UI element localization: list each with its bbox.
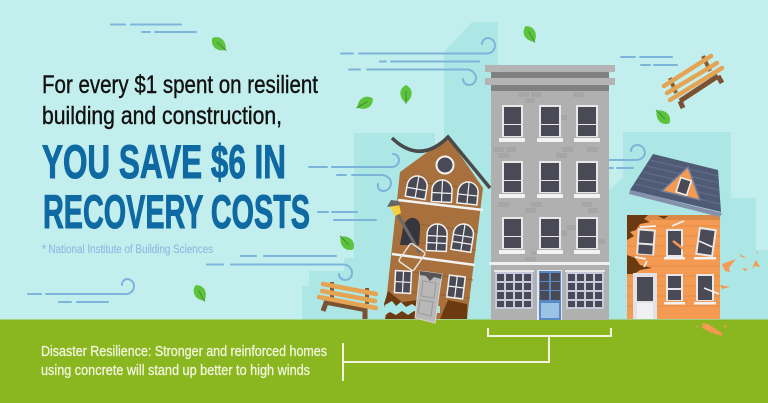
broken trim pieces: [635, 226, 656, 267]
storefront ledge: [489, 262, 610, 265]
background city silhouettes: [302, 22, 768, 320]
arched window: [405, 174, 429, 200]
leaf: [336, 232, 357, 253]
grey reinforced building: [485, 65, 615, 320]
lower window: [694, 274, 719, 304]
leaf: [521, 23, 540, 45]
lower ledge: [392, 254, 475, 265]
caption: [41, 343, 327, 379]
wind streaks: top right: [621, 57, 677, 65]
wind streaks: top left: [111, 24, 196, 32]
dangling window frame: [398, 243, 426, 271]
broken window hole: [400, 218, 420, 245]
wind streaks: bottom left: [28, 279, 134, 302]
siding lines: [395, 180, 480, 298]
flying debris: [696, 251, 760, 336]
displaced roof: [629, 154, 722, 217]
white door: [633, 273, 657, 319]
blue door: [537, 270, 562, 320]
round window: [436, 156, 454, 174]
bracket connector: [343, 328, 611, 381]
intro text: For every $1 spent on resilient: [42, 71, 318, 99]
sill: [694, 257, 716, 260]
siding lines: [627, 226, 720, 306]
wind streaks: right of grey building: [609, 145, 645, 168]
ground: [0, 320, 768, 403]
intro text: [42, 71, 318, 130]
arched window: [426, 223, 448, 252]
leaf: [354, 94, 376, 113]
damaged base: [384, 291, 467, 319]
exposed bricks: [493, 92, 605, 261]
headline: RECOVERY COSTS: [43, 185, 310, 238]
lower window: [664, 274, 685, 304]
exposed brick damage: [627, 215, 668, 274]
torn wall gap: [385, 301, 440, 315]
source note: * National Institute of Building Sciences: [42, 244, 213, 256]
small window: [394, 271, 412, 293]
house wall: [627, 215, 720, 319]
upper windows: [499, 105, 600, 142]
leaf: [400, 85, 412, 104]
middle windows: [499, 161, 600, 198]
lower windows: [499, 217, 600, 254]
house wall: [385, 137, 483, 319]
wind streaks: middle: [309, 154, 399, 220]
upper ledge: [398, 200, 483, 210]
caption: using concrete will stand up better to high winds: [41, 362, 310, 379]
arched window: [451, 223, 475, 252]
roof cornice: [485, 65, 615, 91]
headline: YOU SAVE $6 IN: [42, 135, 286, 188]
building body: [491, 72, 609, 320]
top shadow: [627, 215, 720, 220]
leaf: [652, 106, 673, 127]
roof: [392, 137, 490, 188]
window with sill: [664, 221, 686, 260]
hanging door: [415, 271, 442, 323]
headline: [42, 135, 310, 238]
small window: [447, 275, 465, 299]
right shop window: [565, 270, 605, 309]
tilted window: [636, 228, 656, 256]
tilted window: [695, 227, 717, 257]
leaf: [191, 282, 210, 304]
street lamp: [387, 200, 420, 253]
left shop window: [494, 270, 534, 309]
flying bench: [664, 56, 722, 108]
arched window: [457, 181, 479, 205]
wind streaks: top centre: [341, 38, 495, 85]
caption: Disaster Resilience: Stronger and reinforced homes: [41, 343, 327, 360]
leaf: [209, 34, 230, 55]
arched window: [431, 179, 453, 203]
damaged orange house: [627, 154, 760, 336]
intro text: building and construction,: [42, 102, 282, 130]
bench on ground: [319, 282, 376, 319]
wind streaks: lower middle: [207, 256, 352, 280]
damaged brown house: [384, 137, 490, 323]
